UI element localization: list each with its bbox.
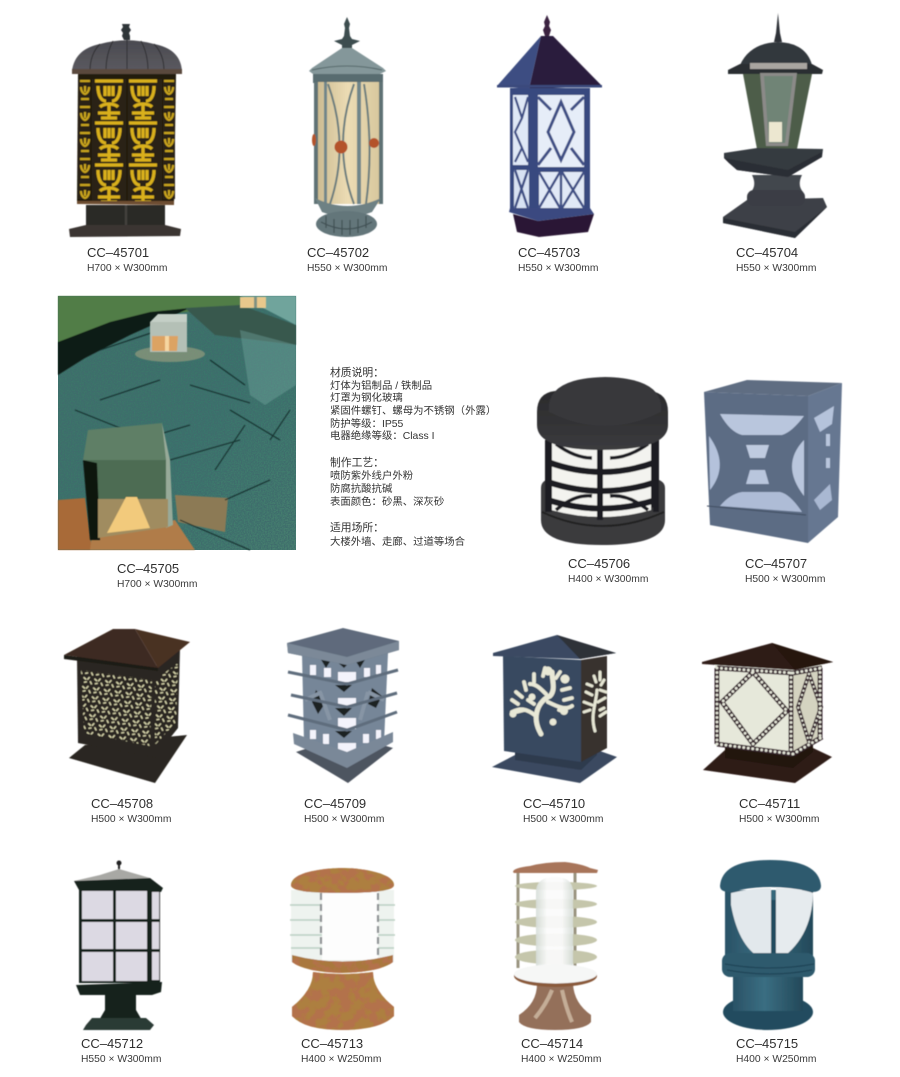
product CC-45706 — [537, 377, 668, 585]
caption CC-45703: CC–45703 — [518, 245, 580, 260]
far lamp — [240, 297, 266, 308]
specification text — [330, 365, 496, 548]
caption CC-45712: H550 × W300mm — [81, 1054, 161, 1065]
caption CC-45707: H500 × W300mm — [745, 574, 825, 585]
suitable locations: 适用场所： — [330, 520, 384, 534]
caption CC-45701: CC–45701 — [87, 245, 149, 260]
material description — [330, 365, 496, 442]
product CC-45714 — [513, 862, 601, 1065]
caption CC-45711: CC–45711 — [739, 796, 800, 811]
lamp CC-45706 — [537, 377, 668, 545]
caption CC-45705: CC–45705 — [117, 561, 179, 576]
caption CC-45715 — [736, 1036, 816, 1065]
caption CC-45713: CC–45713 — [301, 1036, 363, 1051]
caption CC-45709 — [304, 796, 384, 825]
lamp CC-45701 — [69, 24, 182, 237]
middle lamp — [135, 314, 205, 362]
caption CC-45701: H700 × W300mm — [87, 263, 167, 274]
material description: 电器绝缘等级：Class I — [330, 429, 434, 442]
lamp CC-45710 — [492, 635, 617, 783]
caption CC-45714: CC–45714 — [521, 1036, 583, 1051]
production process — [330, 456, 444, 508]
product CC-45710 — [492, 635, 617, 825]
product CC-45713 — [290, 868, 395, 1065]
product CC-45711 — [702, 643, 833, 825]
caption CC-45709: CC–45709 — [304, 796, 366, 811]
caption CC-45701 — [87, 245, 167, 274]
material description: 材质说明： — [330, 365, 384, 379]
product CC-45715 — [720, 860, 821, 1065]
lamp CC-45707 — [704, 380, 842, 543]
photo of lamps on paving at night — [58, 296, 296, 550]
caption CC-45709: H500 × W300mm — [304, 814, 384, 825]
production process: 制作工艺： — [330, 456, 384, 469]
material description: 灯罩为钢化玻璃 — [330, 391, 403, 404]
caption CC-45714: H400 × W250mm — [521, 1054, 601, 1065]
caption CC-45705: H700 × W300mm — [117, 579, 197, 590]
caption CC-45704: CC–45704 — [736, 245, 798, 260]
suitable locations: 大楼外墙、走廊、过道等场合 — [330, 535, 466, 548]
lamp CC-45714 — [513, 862, 598, 1030]
product CC-45701 — [69, 24, 182, 274]
lamp CC-45715 — [720, 860, 821, 1030]
product CC-45712 — [74, 860, 163, 1065]
caption CC-45708 — [91, 796, 171, 825]
caption CC-45705 — [117, 561, 197, 590]
caption CC-45715: CC–45715 — [736, 1036, 798, 1051]
product CC-45703 — [497, 15, 602, 274]
material description: 灯体为铝制品 / 铁制品 — [330, 379, 432, 392]
material description: 紧固件螺钉、螺母为不锈钢（外露） — [330, 404, 496, 417]
product CC-45709 — [287, 628, 399, 825]
tree cut-out side — [584, 672, 606, 731]
production process: 防腐抗酸抗碱 — [330, 482, 393, 495]
product CC-45702 — [307, 17, 387, 274]
lamp CC-45712 — [74, 860, 163, 1030]
production process: 喷防紫外线户外粉 — [330, 469, 414, 482]
caption CC-45708: H500 × W300mm — [91, 814, 171, 825]
caption CC-45715: H400 × W250mm — [736, 1054, 816, 1065]
upper paving and green wall — [58, 296, 296, 550]
caption CC-45707 — [745, 556, 825, 585]
front lamp — [83, 423, 173, 540]
product CC-45704 — [723, 13, 827, 274]
lamp CC-45713 — [290, 868, 395, 1030]
caption CC-45710 — [523, 796, 603, 825]
caption CC-45706: H400 × W300mm — [568, 574, 648, 585]
lamp CC-45702 — [309, 17, 386, 237]
product CC-45705 — [58, 296, 296, 590]
lamp CC-45703 — [497, 15, 602, 237]
lamp CC-45711 — [702, 643, 833, 783]
caption CC-45703: H550 × W300mm — [518, 263, 598, 274]
caption CC-45713 — [301, 1036, 381, 1065]
caption CC-45710: H500 × W300mm — [523, 814, 603, 825]
caption CC-45702 — [307, 245, 387, 274]
caption CC-45706: CC–45706 — [568, 556, 630, 571]
caption CC-45708: CC–45708 — [91, 796, 153, 811]
caption CC-45704 — [736, 245, 816, 274]
caption CC-45710: CC–45710 — [523, 796, 585, 811]
caption CC-45711 — [739, 796, 819, 825]
caption CC-45713: H400 × W250mm — [301, 1054, 381, 1065]
lamp CC-45704 — [723, 13, 827, 238]
caption CC-45712: CC–45712 — [81, 1036, 143, 1051]
caption CC-45702: CC–45702 — [307, 245, 369, 260]
caption CC-45712 — [81, 1036, 161, 1065]
caption CC-45702: H550 × W300mm — [307, 263, 387, 274]
product CC-45707 — [704, 380, 842, 585]
suitable locations — [330, 520, 466, 548]
product CC-45708 — [64, 629, 190, 825]
tree cut-out front — [512, 668, 572, 734]
caption CC-45704: H550 × W300mm — [736, 263, 816, 274]
production process: 表面颜色：砂黑、深灰砂 — [330, 495, 444, 508]
caption CC-45707: CC–45707 — [745, 556, 807, 571]
material description: 防护等级：IP55 — [330, 417, 404, 430]
caption CC-45711: H500 × W300mm — [739, 814, 819, 825]
lamp CC-45709 — [287, 628, 399, 783]
caption CC-45714 — [521, 1036, 601, 1065]
caption CC-45703 — [518, 245, 598, 274]
caption CC-45706 — [568, 556, 648, 585]
lamp CC-45708 — [64, 629, 190, 783]
